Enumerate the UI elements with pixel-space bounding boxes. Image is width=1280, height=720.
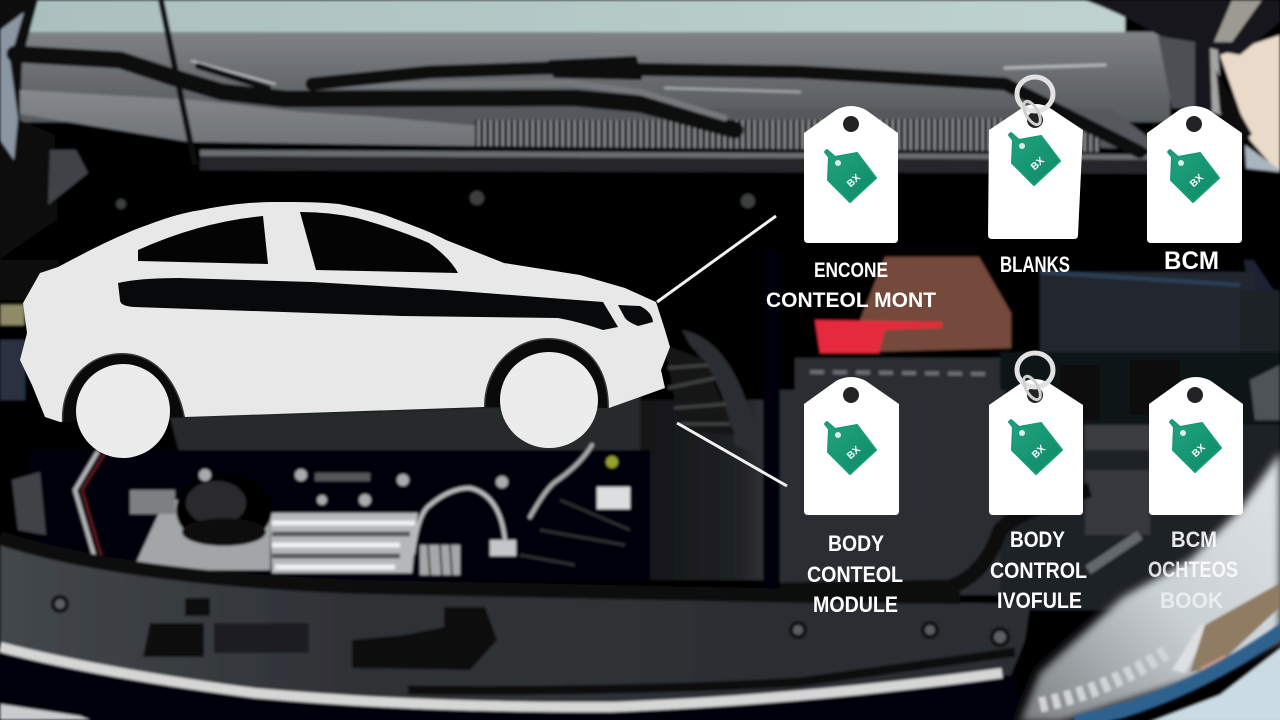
- hood strut rod: [161, 0, 195, 165]
- headlight: [1020, 453, 1280, 720]
- intake hose: [640, 250, 780, 590]
- wheel arch rings: [62, 338, 609, 422]
- blue hood edge: [1075, 628, 1280, 720]
- right side engine components: [780, 390, 1280, 610]
- label: engine control: CONTEOL MONT: [766, 289, 936, 312]
- lower grille black: [0, 650, 1030, 720]
- icon: green price tag: BX: [845, 444, 863, 462]
- label: BCM: BCM: [1164, 247, 1219, 275]
- hood and right pillar: [1085, 0, 1280, 380]
- left side debris: [0, 305, 46, 535]
- label: BCM control: BCM: [1171, 527, 1217, 552]
- label: body control module 1: CONTEOL: [807, 562, 903, 587]
- label: body control module 2: BODY: [1010, 527, 1065, 552]
- chrome grille strip: [0, 647, 1002, 707]
- body side stripe: [118, 278, 618, 330]
- battery cover: [860, 257, 1011, 352]
- tag 3: BCM: [1147, 106, 1242, 243]
- label: BCM control: OCHTEOS: [1148, 557, 1238, 582]
- wiper two: [312, 58, 1140, 152]
- arrow: car to top tags: [657, 216, 776, 302]
- label: BCM control: [1148, 527, 1238, 613]
- tag 4: body control module: [804, 377, 899, 515]
- shroud bolts: [53, 597, 1008, 645]
- label: BCM control: BOOK: [1160, 588, 1223, 613]
- icon: green price tag: BX: [1190, 442, 1208, 460]
- label: engine control: ENCONE: [814, 259, 888, 282]
- icon: green price tag: BX: [1188, 172, 1206, 190]
- tag 6: BCM control: [1149, 377, 1243, 515]
- label: tag 2: BLANKS: [1000, 252, 1070, 277]
- icon: green price tag: BX: [1030, 443, 1048, 461]
- label: body control module 2: [990, 527, 1087, 613]
- radiator shroud: [0, 540, 1030, 715]
- tag 1: engine control module: [804, 106, 898, 243]
- clips on the bulkhead: [116, 191, 755, 209]
- car silhouette: [20, 202, 670, 458]
- arrow: car to bottom tags: [677, 423, 787, 486]
- label: body control module 1: [807, 531, 903, 617]
- icon: green price tag: [1009, 420, 1062, 474]
- car body: [20, 202, 670, 422]
- front window: [300, 212, 458, 273]
- cowl panel: [20, 90, 1165, 150]
- tag 2: module tag with ring: [988, 77, 1083, 239]
- front wheel: [500, 352, 598, 448]
- engine cover under car: [170, 392, 640, 455]
- shroud cut-outs: [143, 598, 497, 670]
- label: body control module 1: MODULE: [813, 592, 898, 617]
- left pillar: [0, 0, 88, 300]
- headlamp: [618, 305, 653, 326]
- shroud black rim: [0, 538, 960, 597]
- wiper one: [15, 54, 735, 130]
- air vents: [475, 118, 1100, 152]
- windshield: [0, 0, 1170, 122]
- icon: green price tag: BX: [1029, 155, 1047, 173]
- hoses: [75, 445, 592, 555]
- tag 5: body control module with ring: [989, 353, 1083, 515]
- fuse box: [795, 272, 1280, 427]
- red terminal: [815, 320, 942, 353]
- icon: green price tag: BX: [845, 172, 863, 190]
- label: engine control: [766, 259, 936, 312]
- engine block: [30, 450, 650, 580]
- rear wheel: [76, 364, 170, 458]
- label: body control module 1: BODY: [828, 531, 884, 556]
- bottom-left chrome: [0, 704, 90, 720]
- label: body control module 2: CONTROL: [990, 558, 1087, 583]
- shadow above grille strip: [408, 652, 1015, 690]
- icon: green price tag: [1009, 133, 1060, 185]
- rear window: [138, 216, 268, 264]
- label: body control module 2: IVOFULE: [997, 588, 1082, 613]
- bulkhead strips: [0, 150, 1280, 260]
